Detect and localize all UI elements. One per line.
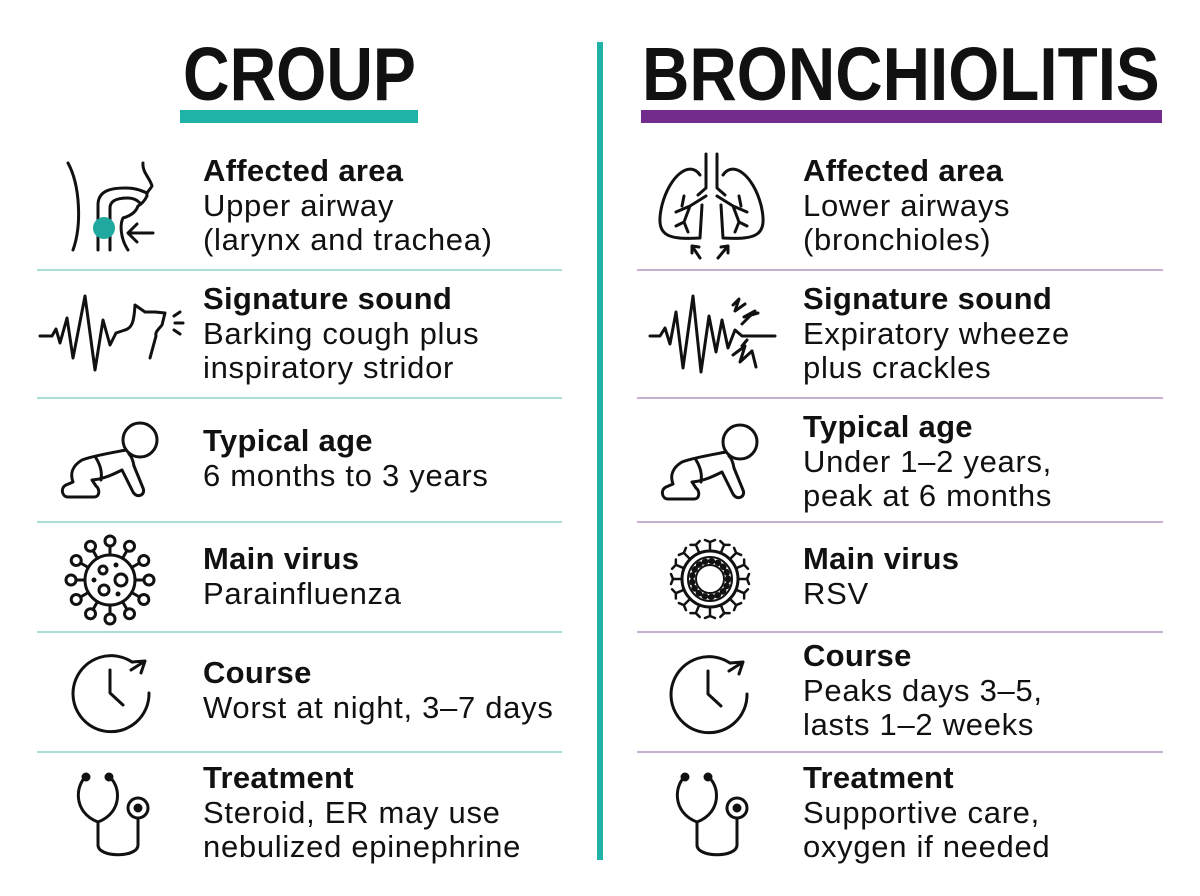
bronchiolitis: course: Course — [803, 638, 912, 673]
icon: barking cough wave — [40, 296, 183, 370]
icon: wheeze wave — [650, 296, 775, 372]
icon: clock right — [671, 657, 747, 733]
bronchiolitis: main virus: RSV — [803, 576, 869, 610]
croup: main virus: Main virus — [203, 541, 359, 576]
bronchiolitis: typical age: Typical age — [803, 409, 973, 444]
bronchiolitis: treatment: Supportive care, — [803, 794, 1040, 830]
bronchiolitis: typical age: Under 1–2 years, — [803, 444, 1052, 478]
croup: signature sound: Signature sound — [203, 281, 452, 316]
icon: lungs — [660, 154, 763, 258]
title: bronchiolitis: BRONCHIOLITIS — [642, 32, 1160, 116]
icon: crawling baby left — [62, 423, 157, 497]
bronchiolitis: main virus: Main virus — [803, 541, 959, 576]
icon: virus RSV — [671, 540, 749, 618]
croup: course: Worst at night, 3–7 days — [203, 690, 554, 724]
croup: treatment: Steroid, ER may use — [203, 794, 501, 830]
icon: crawling baby right — [662, 425, 757, 499]
icon: virus left — [66, 536, 154, 624]
title: croup: CROUP — [183, 32, 416, 116]
croup: signature sound: Barking cough plus — [203, 316, 479, 350]
bronchiolitis: course: Peaks days 3–5, — [803, 672, 1043, 708]
croup underline — [180, 110, 418, 123]
bronchiolitis: typical age: peak at 6 months — [803, 478, 1052, 513]
bronchiolitis: course: lasts 1–2 weeks — [803, 707, 1034, 742]
croup: course — [203, 655, 554, 724]
icon: throat airway — [68, 163, 153, 250]
croup: main virus — [203, 541, 402, 610]
bronchiolitis: affected area: (bronchioles) — [803, 222, 991, 257]
croup: affected area — [203, 153, 493, 257]
croup: typical age: 6 months to 3 years — [203, 458, 489, 492]
bronchiolitis underline — [641, 110, 1162, 123]
bronchiolitis: signature sound — [803, 281, 1070, 385]
croup: typical age: Typical age — [203, 423, 373, 458]
bronchiolitis: main virus — [803, 541, 959, 610]
bronchiolitis: treatment — [803, 760, 1050, 864]
icon: stethoscope left — [78, 774, 148, 855]
croup: signature sound: inspiratory stridor — [203, 350, 454, 385]
croup: typical age — [203, 423, 489, 492]
bronchiolitis: signature sound: plus crackles — [803, 350, 991, 385]
icon: stethoscope right — [677, 774, 747, 855]
croup: treatment — [203, 760, 521, 864]
bronchiolitis: affected area: Affected area — [803, 153, 1003, 188]
icon: clock left — [73, 656, 149, 732]
croup: signature sound — [203, 281, 479, 385]
croup: course: Course — [203, 655, 312, 690]
croup: affected area: Affected area — [203, 153, 403, 188]
bronchiolitis: affected area — [803, 153, 1010, 257]
bronchiolitis: signature sound: Signature sound — [803, 281, 1052, 316]
bronchiolitis: treatment: Treatment — [803, 760, 954, 795]
bronchiolitis: affected area: Lower airways — [803, 188, 1010, 222]
bronchiolitis: typical age — [803, 409, 1052, 513]
center divider line — [597, 42, 603, 860]
bronchiolitis: treatment: oxygen if needed — [803, 829, 1050, 864]
croup: affected area: (larynx and trachea) — [203, 222, 493, 257]
croup: treatment: Treatment — [203, 760, 354, 795]
croup: treatment: nebulized epinephrine — [203, 829, 521, 864]
croup: affected area: Upper airway — [203, 188, 394, 222]
bronchiolitis: course — [803, 638, 1043, 742]
bronchiolitis: signature sound: Expiratory wheeze — [803, 316, 1070, 350]
croup: main virus: Parainfluenza — [203, 576, 402, 610]
